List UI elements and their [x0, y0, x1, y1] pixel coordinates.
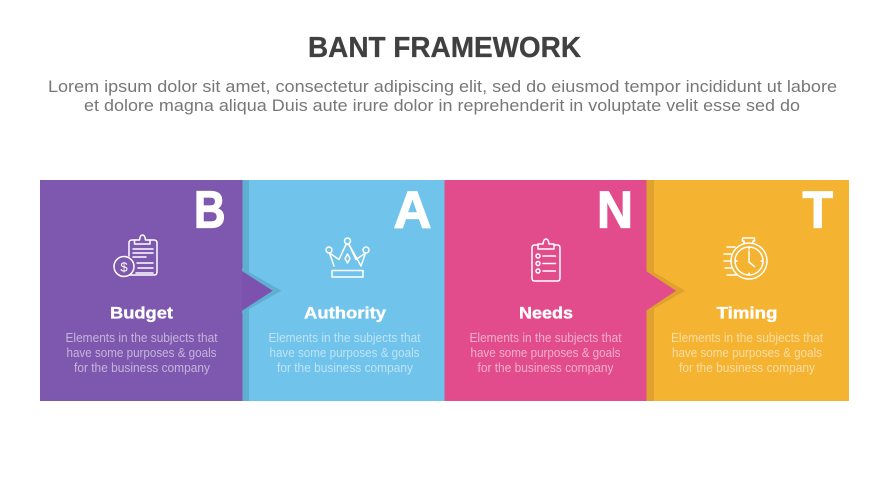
body text: Timing: Elements in the subjects that	[671, 331, 823, 345]
body text: Authority: have some purposes & goals	[270, 346, 420, 360]
body text: Timing: have some purposes & goals	[672, 346, 822, 360]
heading: Timing: Timing	[716, 304, 778, 322]
heading: Authority: Authority	[304, 304, 387, 322]
body text: Needs: Elements in the subjects that	[470, 331, 622, 345]
title: BANT FRAMEWORK	[308, 32, 581, 64]
body text: Authority: Elements in the subjects that	[268, 331, 421, 345]
letter B: B	[194, 182, 226, 240]
panel: needs	[444, 180, 685, 401]
panel: timing	[646, 180, 849, 401]
icon: budget clipboard	[114, 235, 157, 276]
letter T: T	[802, 182, 833, 240]
body text: Budget	[66, 331, 218, 375]
heading: Needs: Needs	[519, 304, 573, 322]
arrow: budget to authority	[242, 271, 273, 311]
subtitle text	[48, 77, 837, 115]
body text: Needs: have some purposes & goals	[470, 346, 620, 360]
letter N: N	[597, 182, 633, 240]
subtitle text: Lorem ipsum dolor sit amet, consectetur adipiscing elit, sed do eiusmod tempor incididunt ut labore	[48, 77, 837, 96]
panel: budget	[40, 180, 282, 401]
letter A: A	[394, 182, 432, 240]
body text: Authority	[268, 331, 421, 375]
arrow shadow: needs to timing	[646, 268, 685, 313]
body text: Timing	[671, 331, 823, 375]
icon: crown	[326, 238, 369, 277]
body text: Budget: have some purposes & goals	[66, 346, 216, 360]
body text: Needs: for the business company	[478, 361, 614, 375]
body text: Timing: for the business company	[679, 361, 816, 375]
arrow shadow: budget to authority	[242, 268, 282, 313]
body text: Authority: for the business company	[277, 361, 414, 375]
panel: authority	[242, 180, 445, 401]
body text: Needs	[470, 331, 622, 375]
icon: stopwatch	[724, 238, 767, 279]
body text: Budget: for the business company	[74, 361, 211, 375]
heading: Budget: Budget	[110, 304, 173, 322]
icon: budget clipboard: $	[120, 260, 128, 274]
subtitle text: et dolore magna aliqua Duis aute irure dolor in reprehenderit in voluptate velit esse sed do	[84, 96, 800, 115]
arrow: needs to timing	[646, 271, 676, 311]
icon: checklist clipboard	[532, 239, 560, 281]
body text: Budget: Elements in the subjects that	[66, 331, 218, 345]
